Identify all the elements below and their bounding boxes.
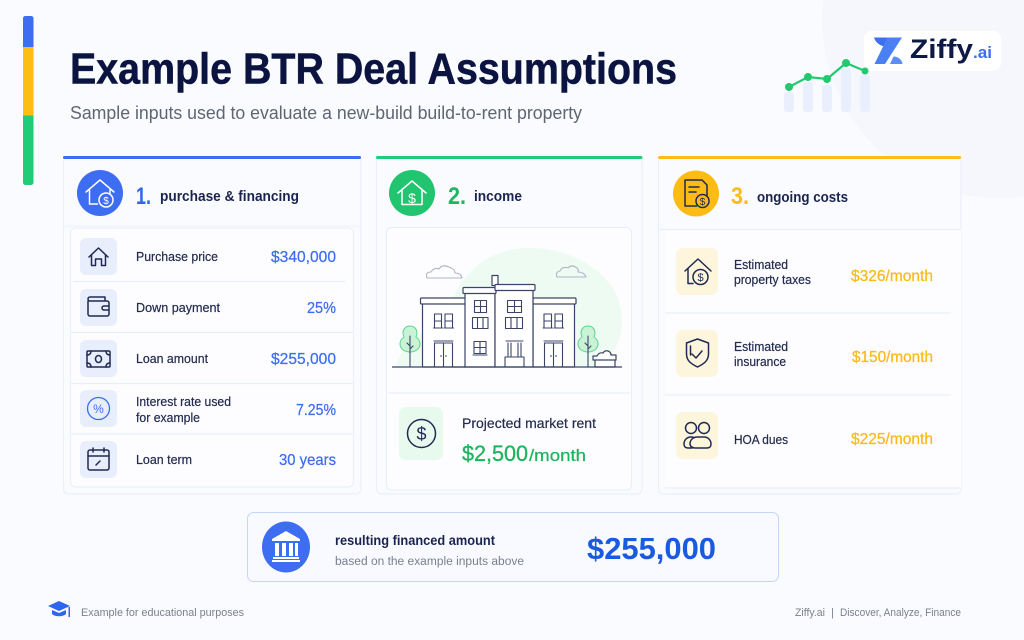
row: down payment bbox=[80, 289, 336, 326]
footer: educational note bbox=[48, 601, 244, 619]
heading number 2: 2. bbox=[448, 183, 466, 210]
row: property taxes: $326/month bbox=[851, 268, 933, 285]
row: down payment: Down payment bbox=[136, 301, 221, 315]
row: HOA dues bbox=[676, 412, 933, 459]
income card bbox=[386, 228, 632, 490]
row: loan term: 30 years bbox=[279, 452, 336, 469]
row: loan amount bbox=[80, 340, 336, 377]
footer: brand line bbox=[795, 607, 961, 619]
rent row bbox=[399, 407, 596, 466]
row: interest rate: 7.25% bbox=[296, 402, 336, 419]
panel: purchase & financing bbox=[63, 156, 361, 494]
icon: document with dollar: $ bbox=[700, 197, 706, 208]
icon: house with dollar bbox=[77, 170, 123, 216]
row: HOA dues: HOA dues bbox=[734, 433, 788, 447]
row: loan amount: $255,000 bbox=[271, 351, 336, 368]
chart decoration bbox=[784, 59, 870, 112]
row: interest rate: for example bbox=[136, 411, 200, 425]
row: interest rate bbox=[80, 390, 336, 427]
row: interest rate: Interest rate used bbox=[136, 395, 231, 409]
logo: Ziffy bbox=[910, 34, 973, 64]
building bbox=[420, 276, 576, 367]
row: property taxes: property taxes bbox=[734, 273, 811, 287]
row: insurance: insurance bbox=[734, 355, 786, 369]
row: loan term: Loan term bbox=[136, 453, 192, 467]
footer: brand line: Ziffy.ai bbox=[795, 607, 825, 619]
icon: document with dollar bbox=[673, 170, 719, 216]
footer: brand line: Discover, Analyze, Finance bbox=[840, 607, 961, 619]
callout: resulting financed amount: based on the example inputs above bbox=[335, 556, 524, 568]
accent bar bbox=[23, 16, 34, 185]
logo bbox=[862, 31, 1001, 74]
footer: brand line: | bbox=[831, 607, 834, 619]
row: loan amount: Loan amount bbox=[136, 352, 209, 366]
row: property taxes: $ bbox=[697, 272, 704, 284]
heading: purchase & financing bbox=[160, 189, 299, 205]
row: insurance: Estimated bbox=[734, 340, 788, 354]
row: insurance: $150/month bbox=[852, 349, 933, 366]
row: property taxes: Estimated bbox=[734, 258, 788, 272]
row: purchase price: $340,000 bbox=[271, 249, 336, 266]
callout: resulting financed amount: resulting financed amount bbox=[335, 532, 495, 548]
logo: .ai bbox=[973, 43, 992, 62]
subtitle: Sample inputs used to evaluate a new-build build-to-rent property bbox=[70, 103, 582, 123]
row: loan term bbox=[80, 441, 336, 478]
icon: house with dollar bbox=[389, 170, 435, 216]
row: HOA dues: $225/month bbox=[851, 431, 933, 448]
row: insurance bbox=[676, 330, 933, 377]
heading number 1: 1. bbox=[136, 183, 151, 210]
rent row: /month bbox=[529, 446, 586, 465]
title: Example BTR Deal Assumptions bbox=[70, 44, 677, 94]
row: property taxes bbox=[676, 248, 933, 295]
panel: ongoing costs bbox=[658, 156, 961, 494]
heading number 3: 3. bbox=[731, 183, 749, 210]
row: purchase price: Purchase price bbox=[136, 250, 218, 264]
trees bbox=[400, 326, 616, 367]
row: interest rate: % bbox=[93, 402, 104, 416]
row: down payment: 25% bbox=[307, 300, 336, 317]
rent row: $2,500 bbox=[462, 441, 528, 466]
heading: ongoing costs bbox=[757, 190, 848, 206]
icon: house with dollar: $ bbox=[408, 190, 416, 206]
footer: educational note: Example for educational purposes bbox=[81, 607, 244, 619]
costs card bbox=[659, 230, 961, 488]
row: purchase price bbox=[80, 238, 336, 275]
callout: resulting financed amount: $255,000 bbox=[587, 531, 716, 566]
panel: income bbox=[376, 156, 642, 494]
icon: bank bbox=[262, 522, 310, 572]
callout: resulting financed amount bbox=[248, 512, 778, 582]
heading: income bbox=[474, 189, 522, 205]
illustration: apartment building bbox=[392, 248, 622, 367]
rent row: $ bbox=[416, 424, 427, 444]
icon: house with dollar: $ bbox=[103, 196, 109, 207]
inputs card bbox=[70, 228, 354, 487]
rent row: Projected market rent bbox=[462, 415, 596, 431]
